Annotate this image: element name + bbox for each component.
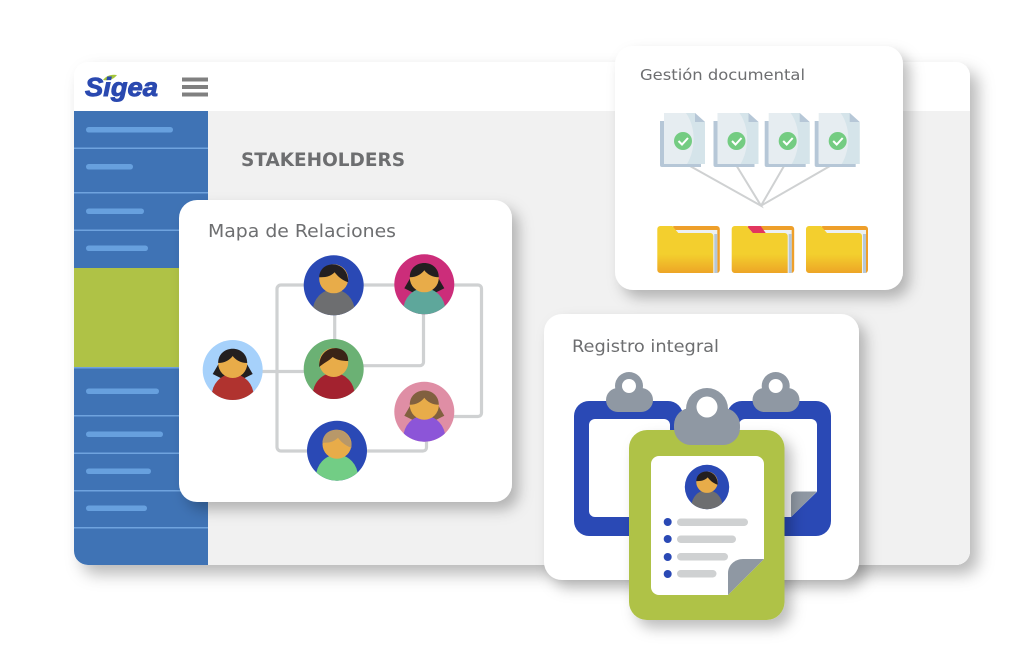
person: light blue <box>202 340 263 400</box>
list lines <box>677 518 748 578</box>
panel: gestion documental <box>615 46 903 290</box>
folder 2 with red tab <box>732 226 794 273</box>
folder 1 <box>657 226 720 273</box>
list bullets <box>664 518 672 578</box>
connection lines <box>233 285 482 451</box>
logo: Sigea: Sigea <box>85 72 158 102</box>
panel: mapa de relaciones <box>179 200 512 502</box>
person: blue with green shirt <box>307 420 367 481</box>
panel title: registro: Registro integral <box>572 337 719 357</box>
heading: stakeholders: STAKEHOLDERS <box>241 149 405 171</box>
document 4 <box>815 113 860 167</box>
content area <box>208 111 970 565</box>
clipboard: right blue <box>727 372 831 536</box>
document 3 <box>765 113 810 167</box>
clipboard: front green <box>629 388 784 620</box>
icon: hamburger menu <box>182 78 208 96</box>
clip <box>674 388 740 445</box>
panel title: mapa: Mapa de Relaciones <box>208 221 396 242</box>
person: green <box>304 339 364 399</box>
clipboard: left blue <box>574 372 683 536</box>
connector lines <box>690 166 830 206</box>
document 1 <box>660 113 705 167</box>
panel: registro integral <box>544 314 859 620</box>
person: blue <box>304 255 364 316</box>
sidebar <box>74 111 208 565</box>
folder 3 <box>806 226 868 273</box>
person: magenta <box>394 254 454 314</box>
person: pink <box>394 382 454 442</box>
app window <box>74 62 970 565</box>
avatar <box>684 464 730 510</box>
panel title: gestion: Gestión documental <box>640 66 805 84</box>
document 2 <box>714 113 758 167</box>
